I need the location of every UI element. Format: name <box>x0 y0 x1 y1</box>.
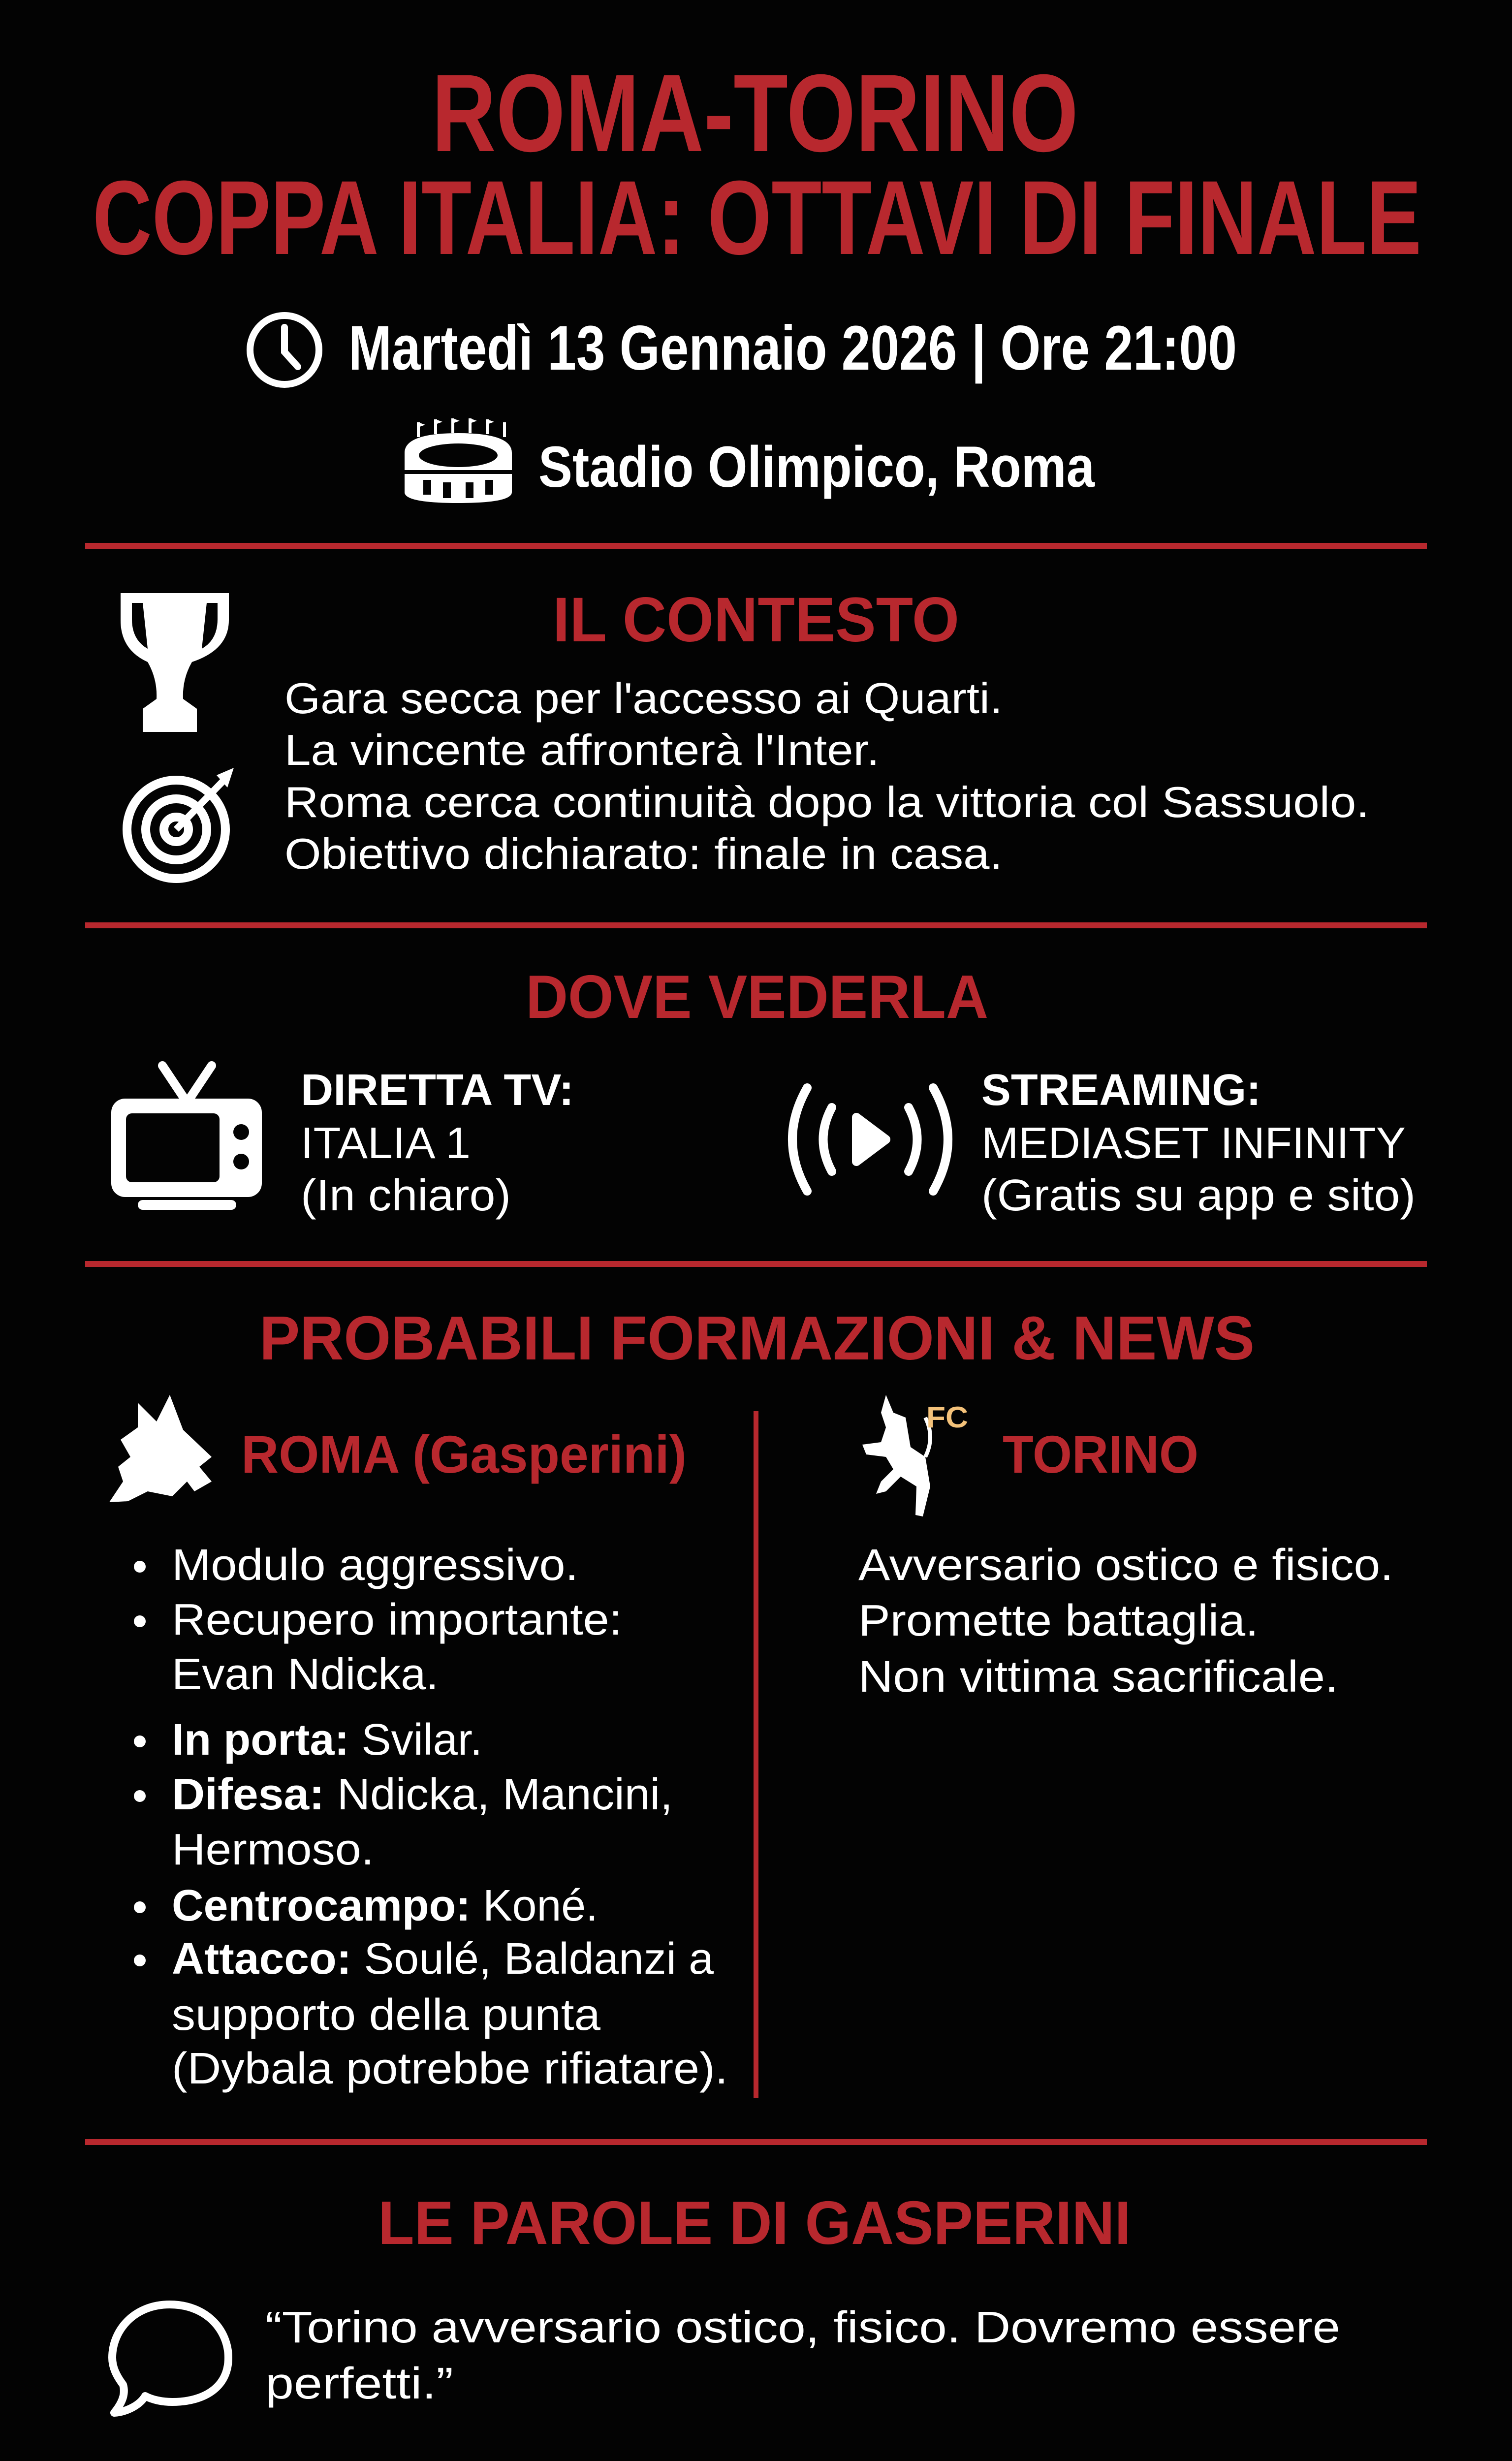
text: tv: (In chiaro) <box>301 1171 511 1220</box>
list: roma: supporto della punta <box>172 1990 601 2040</box>
icon: torino bull: FC <box>926 1401 968 1434</box>
text: context lines: Roma cerca continuità dopo la vittoria col Sassuolo. <box>284 778 1369 826</box>
list: roma: Difesa: Ndicka, Mancini, <box>172 1770 673 1819</box>
icon: torino bull <box>862 1395 968 1516</box>
icon: stadium <box>405 418 512 503</box>
list: roma: (Dybala potrebbe rifiatare). <box>172 2044 728 2093</box>
quote 1: perfetti.” <box>265 2359 453 2408</box>
text: torino: Promette battaglia. <box>858 1596 1259 1645</box>
title <box>93 52 1421 277</box>
heading: probabili formazioni: PROBABILI FORMAZIONI & NEWS <box>259 1303 1255 1373</box>
text: torino <box>858 1541 1393 1702</box>
text: tv <box>301 1066 574 1220</box>
panel: il contesto <box>121 585 1369 879</box>
text: context lines: Gara secca per l'accesso ai Quarti. <box>284 674 1003 723</box>
icon: roma wolf <box>109 1395 212 1502</box>
panel: formazioni <box>109 1303 1393 2098</box>
heading: le parole: LE PAROLE DI GASPERINI <box>378 2189 1131 2257</box>
title: ROMA-TORINO <box>432 52 1078 175</box>
venue <box>405 418 1095 503</box>
panel: dove vederla <box>111 963 1416 1220</box>
text: context lines: Obiettivo dichiarato: finale in casa. <box>284 829 1003 878</box>
heading: torino: TORINO <box>1003 1424 1198 1484</box>
quote 1: “Torino avversario ostico, fisico. Dovremo essere <box>265 2303 1340 2352</box>
text: context lines <box>284 674 1369 878</box>
text: tv: ITALIA 1 <box>301 1119 471 1168</box>
list: roma: Hermoso. <box>172 1825 374 1874</box>
venue: Stadio Olimpico, Roma <box>538 435 1095 500</box>
text: streaming: STREAMING: <box>981 1066 1261 1115</box>
heading: roma: ROMA (Gasperini) <box>241 1424 687 1484</box>
text: torino: Non vittima sacrificale. <box>858 1652 1338 1702</box>
list: roma: Recupero importante: <box>172 1595 622 1644</box>
text: streaming <box>981 1066 1416 1220</box>
icon: trophy <box>121 593 229 732</box>
list: roma: Modulo aggressivo. <box>172 1541 578 1590</box>
heading: il contesto: IL CONTESTO <box>553 585 959 655</box>
list: roma: Attacco: Soulé, Baldanzi a <box>172 1934 714 1984</box>
text: context lines: La vincente affronterà l'Inter. <box>284 726 880 774</box>
date and time: Martedì 13 Gennaio 2026 | Ore 21:00 <box>348 313 1237 384</box>
heading: dove vederla: DOVE VEDERLA <box>526 963 988 1031</box>
icon: tv <box>111 1066 262 1210</box>
list: roma: Evan Ndicka. <box>172 1650 439 1699</box>
icon: target <box>127 768 234 879</box>
panel: parole di gasperini <box>112 2189 1340 2461</box>
list: roma: Centrocampo: Koné. <box>172 1881 598 1930</box>
icon: speech bubble <box>112 2304 228 2413</box>
list: roma <box>134 1541 728 2093</box>
text: streaming: (Gratis su app e sito) <box>981 1171 1416 1220</box>
quote 1 <box>265 2303 1340 2408</box>
text: tv: DIRETTA TV: <box>301 1066 574 1115</box>
text: streaming: MEDIASET INFINITY <box>981 1119 1406 1168</box>
icon: streaming <box>792 1088 948 1191</box>
text: torino: Avversario ostico e fisico. <box>858 1541 1393 1590</box>
list: roma: In porta: Svilar. <box>172 1715 482 1765</box>
icon: clock <box>250 316 319 384</box>
